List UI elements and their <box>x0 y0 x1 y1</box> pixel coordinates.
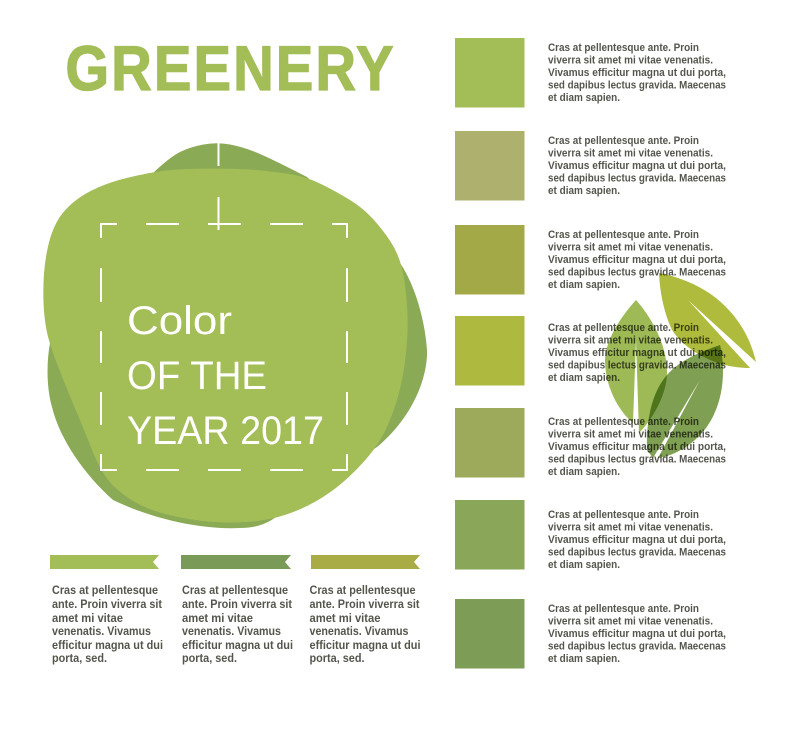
ribbon 2 <box>181 555 291 569</box>
text block: swatch 5: Cras at pellentesque ante. Proin <box>548 416 699 428</box>
blob heading <box>127 299 324 453</box>
panel: color of the year blob <box>43 142 427 528</box>
text block: column 1: Cras at pellentesque <box>52 583 158 597</box>
text block: swatch 2: Cras at pellentesque ante. Proin <box>548 135 699 147</box>
title: GREENERY <box>66 33 394 104</box>
text block: swatch 4: Vivamus efficitur magna ut dui porta, <box>548 347 726 359</box>
text block: swatch 7: viverra sit amet mi vitae venenatis. <box>548 616 713 628</box>
leaf: bottom right <box>647 345 723 458</box>
text block: swatch 7 <box>548 603 726 665</box>
text block: swatch 3: Cras at pellentesque ante. Proin <box>548 229 699 241</box>
text block: swatch 5 <box>548 416 726 478</box>
text block: swatch 6: viverra sit amet mi vitae venenatis. <box>548 522 713 534</box>
leaf: top right <box>659 273 756 368</box>
text block: column 3: porta, sed. <box>310 651 364 665</box>
swatch 4 <box>455 316 524 386</box>
text block: swatch 1: Vivamus efficitur magna ut dui porta, <box>548 67 726 79</box>
text block: swatch 1: Cras at pellentesque ante. Proin <box>548 42 699 54</box>
text block: swatch 2: viverra sit amet mi vitae venenatis. <box>548 148 713 160</box>
blob heading: Color <box>127 299 232 343</box>
front blob <box>43 169 408 522</box>
text block: column 1 <box>52 583 163 665</box>
text block: swatch 1 <box>548 42 726 104</box>
text block: swatch 7: sed dapibus lectus gravida. Maecenas <box>548 640 726 652</box>
text block: column 1: amet mi vitae <box>52 611 123 625</box>
text block: swatch 4: et diam sapien. <box>548 372 620 384</box>
text block: swatch 1: sed dapibus lectus gravida. Maecenas <box>548 80 726 92</box>
text block: swatch 5: viverra sit amet mi vitae venenatis. <box>548 428 713 440</box>
text block: swatch 3: sed dapibus lectus gravida. Maecenas <box>548 266 726 278</box>
text block: column 1: venenatis. Vivamus <box>52 624 151 638</box>
swatch 6 <box>455 500 524 570</box>
text block: column 2: amet mi vitae <box>182 611 253 625</box>
text block: swatch 3 <box>548 229 726 291</box>
text block: swatch 1: et diam sapien. <box>548 92 620 104</box>
text block: column 3: efficitur magna ut dui <box>310 638 420 652</box>
text block: swatch 2: Vivamus efficitur magna ut dui porta, <box>548 160 726 172</box>
text block: swatch 6: Vivamus efficitur magna ut dui porta, <box>548 534 726 546</box>
text block: column 2 <box>182 583 293 665</box>
swatch 1 <box>455 38 524 108</box>
text block: swatch 3: et diam sapien. <box>548 279 620 291</box>
text block: column 3: Cras at pellentesque <box>310 583 416 597</box>
text block: column 3: amet mi vitae <box>310 611 381 625</box>
dashed frame <box>101 142 347 470</box>
text block: column 1: ante. Proin viverra sit <box>52 597 162 611</box>
text block: swatch 7: et diam sapien. <box>548 653 620 665</box>
text block: swatch 3: viverra sit amet mi vitae venenatis. <box>548 242 713 254</box>
text block: swatch 2: sed dapibus lectus gravida. Maecenas <box>548 172 726 184</box>
text block: swatch 5: sed dapibus lectus gravida. Maecenas <box>548 454 726 466</box>
blob heading: YEAR 2017 <box>127 409 324 453</box>
text block: swatch 5: Vivamus efficitur magna ut dui porta, <box>548 441 726 453</box>
text block: column 3 <box>310 583 420 665</box>
text block: column 1: porta, sed. <box>52 651 107 665</box>
text block: swatch 2: et diam sapien. <box>548 185 620 197</box>
text block: swatch 6: sed dapibus lectus gravida. Maecenas <box>548 546 726 558</box>
swatch 5 <box>455 408 524 478</box>
leaf: left <box>605 300 667 433</box>
text block: swatch 7: Vivamus efficitur magna ut dui porta, <box>548 628 726 640</box>
text block: swatch 2 <box>548 135 726 197</box>
swatch 3 <box>455 225 524 294</box>
text block: swatch 7: Cras at pellentesque ante. Proin <box>548 603 699 615</box>
text block: swatch 4: viverra sit amet mi vitae venenatis. <box>548 334 713 346</box>
text block: swatch 3: Vivamus efficitur magna ut dui porta, <box>548 254 726 266</box>
text block: swatch 1: viverra sit amet mi vitae venenatis. <box>548 54 713 66</box>
swatch 2 <box>455 131 524 200</box>
text block: swatch 4 <box>548 322 726 384</box>
text block: column 3: ante. Proin viverra sit <box>310 597 420 611</box>
text block: column 2: ante. Proin viverra sit <box>182 597 292 611</box>
text block: column 2: efficitur magna ut dui <box>182 638 293 652</box>
text block: column 2: porta, sed. <box>182 651 237 665</box>
back blob <box>48 143 427 528</box>
swatch 7 <box>455 599 524 668</box>
text block: column 2: venenatis. Vivamus <box>182 624 281 638</box>
text block: column 2: Cras at pellentesque <box>182 583 288 597</box>
text block: column 1: efficitur magna ut dui <box>52 638 163 652</box>
blob heading: OF THE <box>127 354 267 398</box>
icon: leaves <box>605 273 756 458</box>
text block: swatch 6: et diam sapien. <box>548 559 620 571</box>
text block: swatch 5: et diam sapien. <box>548 466 620 478</box>
ribbon 1 <box>50 555 159 569</box>
text block: swatch 4: sed dapibus lectus gravida. Maecenas <box>548 360 726 372</box>
text block: swatch 6: Cras at pellentesque ante. Proin <box>548 509 699 521</box>
text block: swatch 4: Cras at pellentesque ante. Proin <box>548 322 699 334</box>
ribbon 3 <box>311 555 420 569</box>
text block: swatch 6 <box>548 509 726 571</box>
text block: column 3: venenatis. Vivamus <box>310 624 409 638</box>
